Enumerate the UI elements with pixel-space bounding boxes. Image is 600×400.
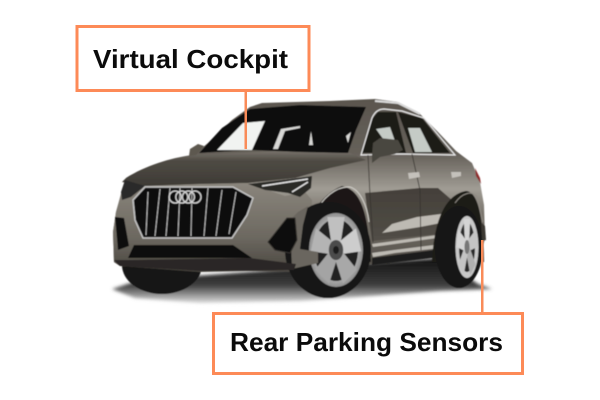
label: virtual cockpit: Virtual Cockpit	[93, 44, 288, 74]
rear arch trim	[455, 193, 483, 222]
left mirror	[189, 144, 204, 156]
headlight detail	[262, 179, 308, 192]
right headlight	[248, 176, 312, 197]
window reflections	[376, 127, 432, 152]
hood	[122, 150, 366, 186]
side sill	[372, 233, 452, 257]
side window rear	[398, 112, 450, 153]
callout: rear parking sensors	[214, 314, 522, 374]
rear wheel	[435, 206, 483, 288]
left air intake	[115, 217, 129, 250]
bumper corner over wheel	[290, 206, 318, 269]
door handles	[408, 172, 461, 179]
right air intake	[268, 218, 297, 253]
right mirror	[372, 138, 403, 163]
grille	[133, 187, 253, 238]
roof rail	[375, 101, 420, 114]
connector line: virtual cockpit	[244, 91, 247, 149]
front left wheel	[122, 236, 202, 294]
seat reflections	[273, 126, 351, 149]
front wheel arch	[298, 186, 371, 262]
label: rear parking sensors: Rear Parking Sensors	[230, 327, 503, 357]
front right wheel	[285, 202, 371, 298]
front arch trim	[314, 187, 369, 222]
door lower panel	[365, 188, 453, 241]
callout: virtual cockpit	[77, 26, 309, 90]
door crease highlight	[382, 214, 446, 233]
connector line: rear parking sensors	[481, 240, 484, 313]
door seams	[368, 154, 421, 250]
tail light	[475, 168, 481, 184]
car photo	[112, 99, 492, 303]
front splitter	[114, 258, 296, 271]
front bumper	[113, 183, 312, 272]
rear bumper tip	[481, 222, 486, 241]
windshield reflection	[217, 121, 265, 150]
ground shadow	[112, 258, 492, 303]
audi rings	[169, 191, 201, 203]
lower grille	[128, 245, 252, 258]
car body	[113, 99, 485, 272]
windshield	[199, 105, 366, 153]
rear wheel arch	[432, 191, 484, 262]
left headlight	[121, 180, 145, 200]
side window front	[362, 112, 406, 153]
lower sill	[372, 248, 450, 265]
window chrome trim	[361, 109, 455, 155]
